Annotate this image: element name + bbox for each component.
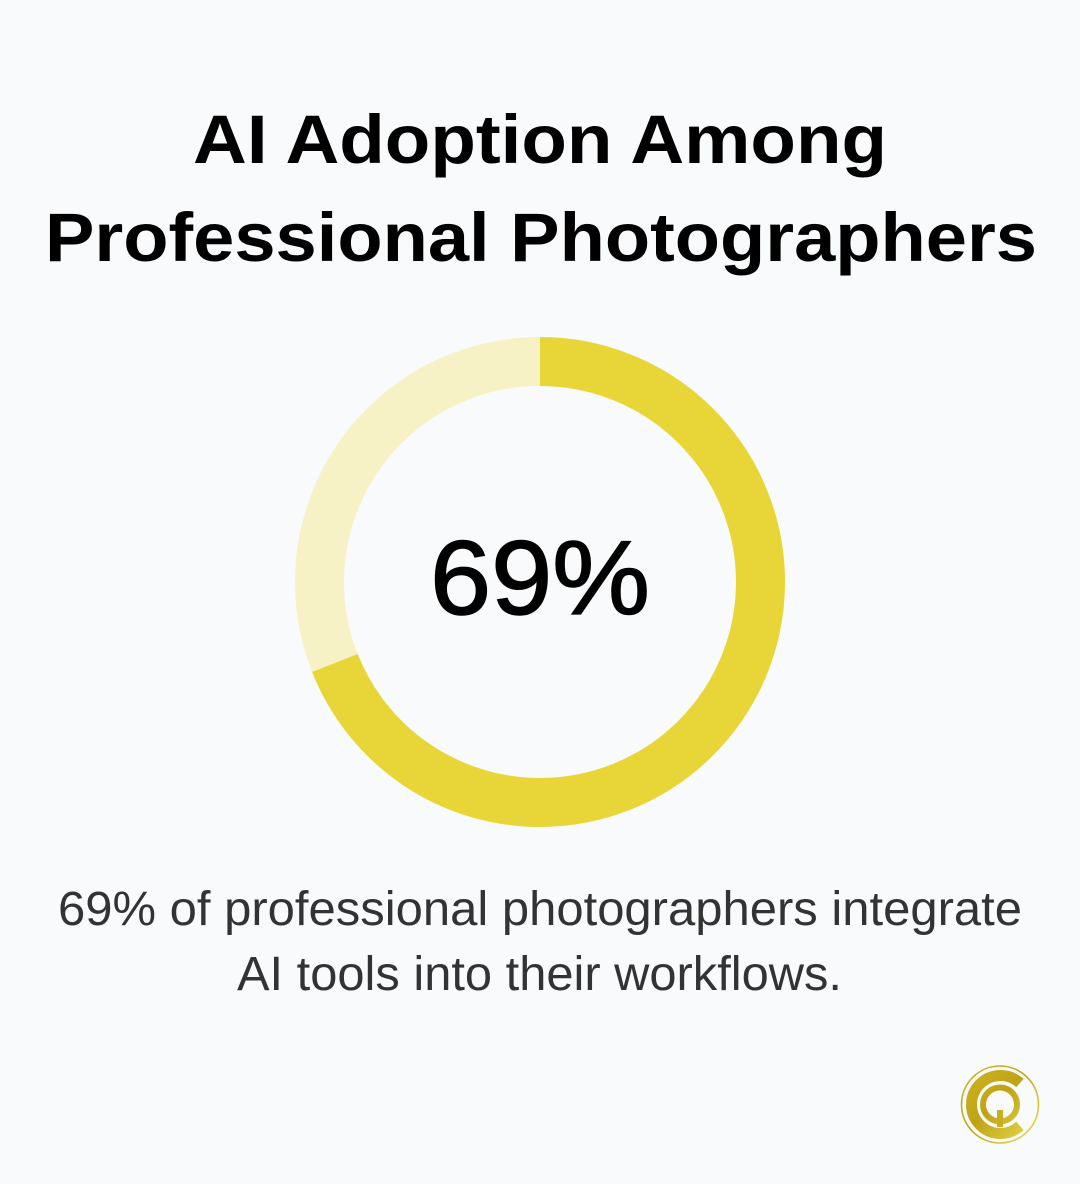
title: AI Adoption Among [193,101,887,178]
description: AI tools into their workflows. [237,948,842,1001]
description [58,883,1022,1001]
title: Professional Photographers [45,199,1037,276]
donut value: 69% [430,520,650,637]
title [45,101,1037,276]
description: 69% of professional photographers integrate [58,883,1022,936]
icon: gold logo [962,1066,1038,1143]
donut chart: 69% [320,362,760,802]
